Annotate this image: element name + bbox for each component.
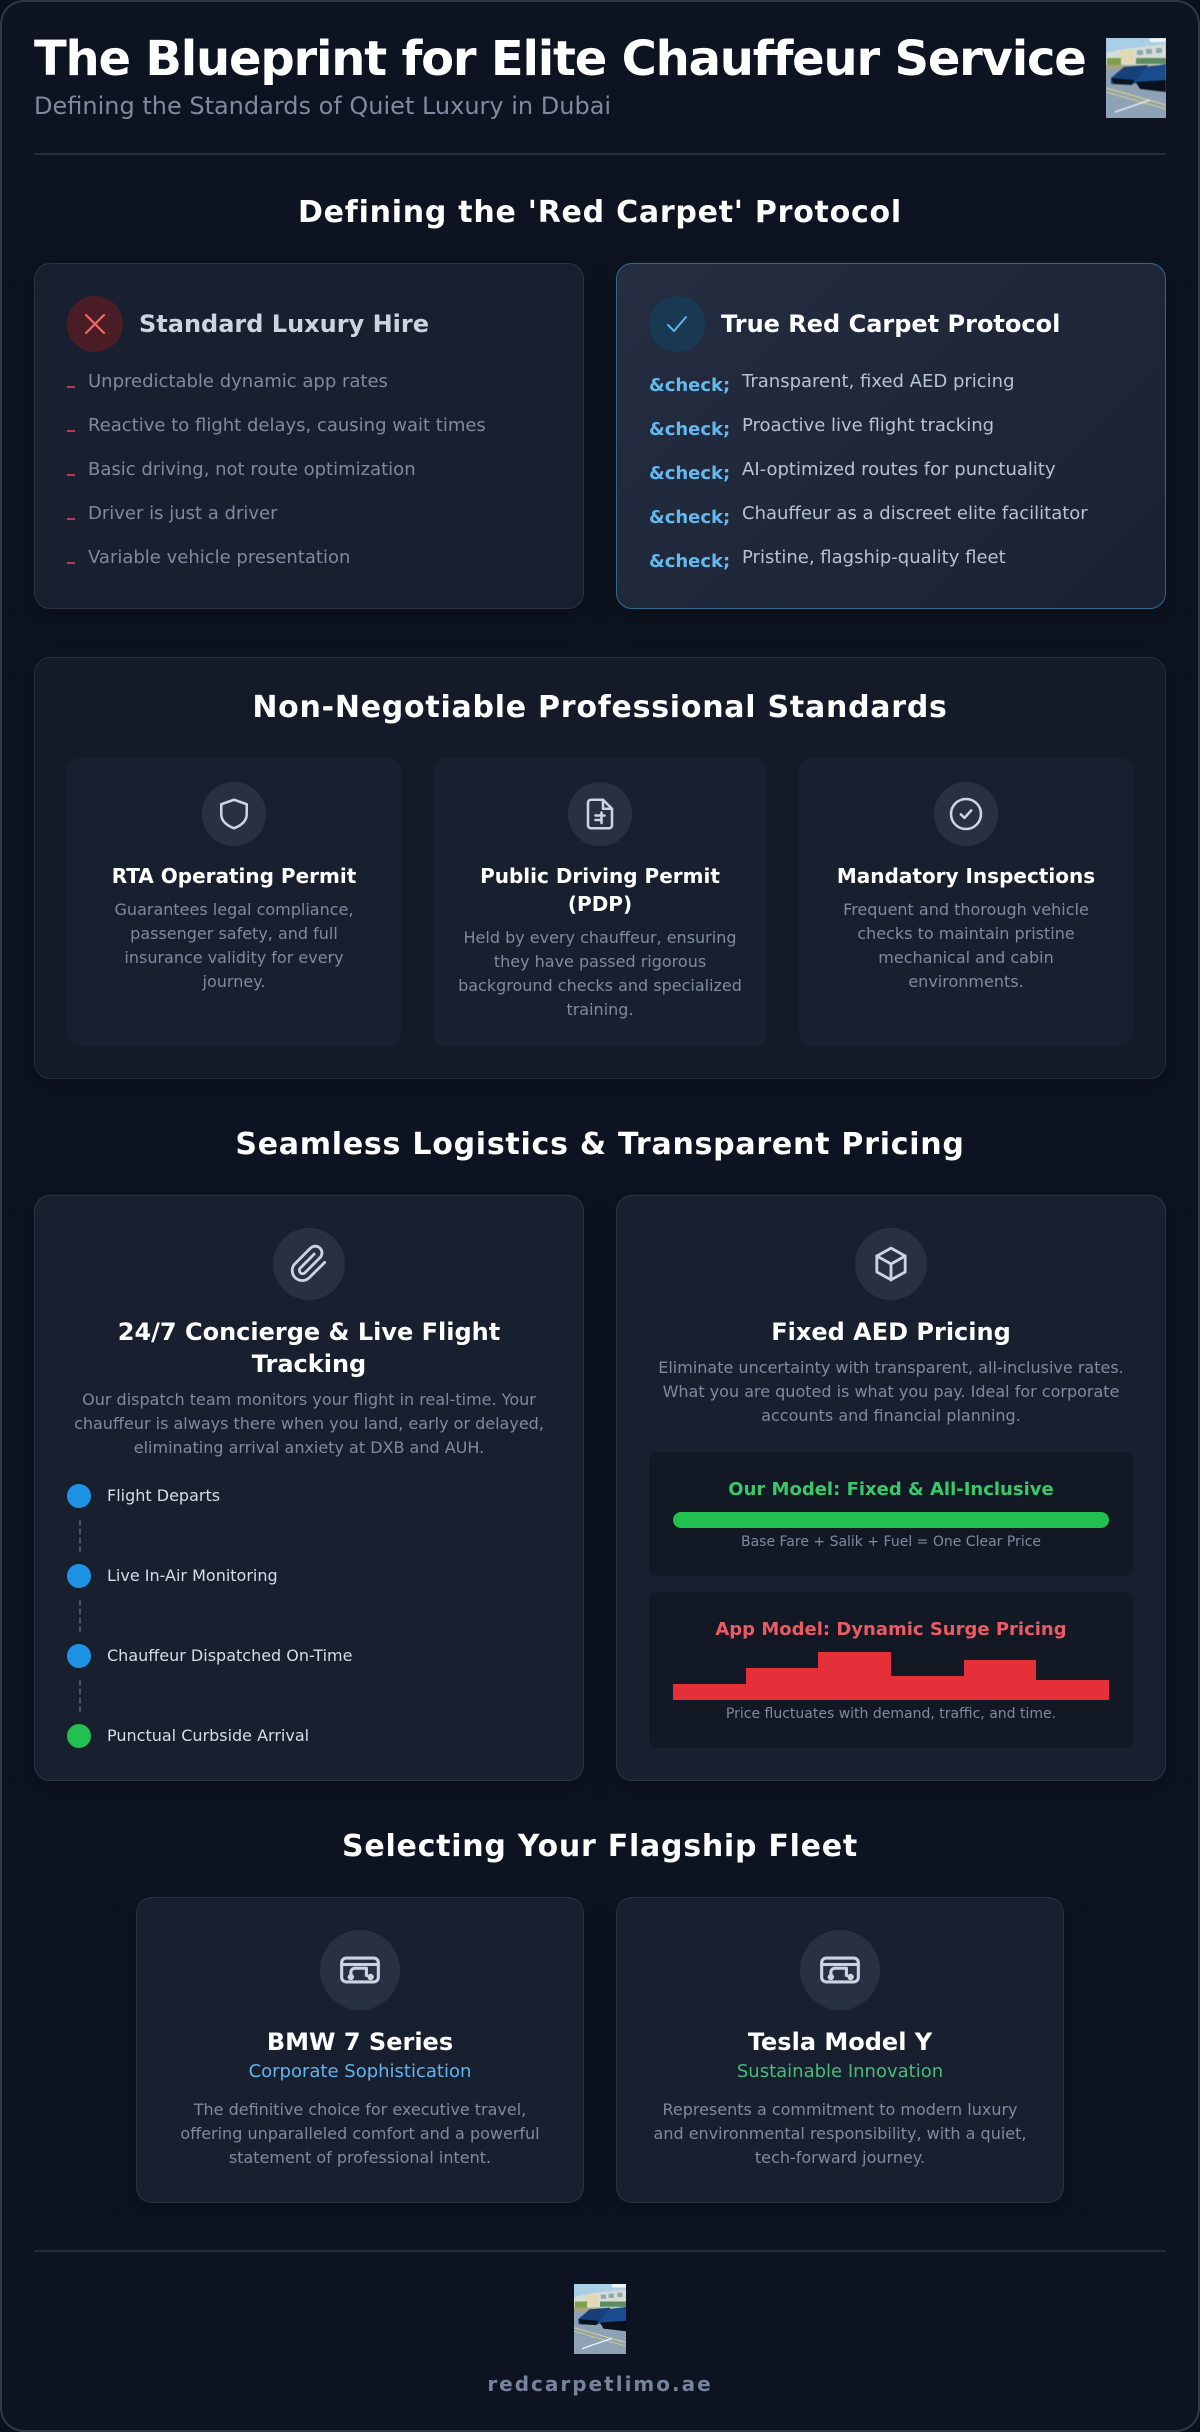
panel: professional standards — [34, 657, 1166, 1079]
card text: Guarantees legal compliance, passenger safety, and full insurance validity for every journey. — [115, 900, 353, 991]
car name: BMW 7 Series — [267, 2028, 453, 2056]
section heading: standards: Non-Negotiable Professional Standards — [252, 690, 948, 725]
card: mandatory inspections — [799, 758, 1133, 1046]
card: RTA operating permit — [67, 758, 401, 1046]
title: The Blueprint for Elite Chauffeur Service — [34, 31, 1086, 87]
card title: Public Driving Permit (PDP) — [480, 864, 720, 916]
heading: concierge: 24/7 Concierge & Live Flight Tracking — [118, 1318, 500, 1378]
card: Tesla Model Y — [616, 1897, 1064, 2203]
icon: car — [800, 1930, 880, 2010]
panel heading: standard luxury hire: Standard Luxury Hire — [139, 310, 429, 338]
car name: Tesla Model Y — [748, 2028, 932, 2056]
list: standard luxury hire drawbacks: Variable vehicle presentation — [88, 547, 350, 568]
list: red carpet benefits: Proactive live flight tracking — [742, 415, 994, 436]
icon: paperclip — [273, 1228, 345, 1300]
car description: Represents a commitment to modern luxury and environmental responsibility, with a quiet, tech-forward journey. — [654, 2100, 1026, 2167]
chart: fixed price bar — [673, 1512, 1109, 1528]
icon: circle check — [934, 782, 998, 846]
list: red carpet benefits: Pristine, flagship-quality fleet — [742, 547, 1006, 568]
image: fleet photo — [1106, 38, 1166, 118]
icon: document — [568, 782, 632, 846]
image: fleet photo small — [574, 2284, 626, 2354]
list: standard luxury hire drawbacks: Reactive to flight delays, causing wait times — [88, 415, 486, 436]
website: redcarpetlimo.ae — [487, 2372, 713, 2396]
icon: blue check — [649, 296, 705, 352]
chart: surge pricing bars — [673, 1652, 1109, 1700]
text: pricing description: Eliminate uncertainty with transparent, all-inclusive rates. What you are quoted is what you pay. Ideal for corporate accounts and financial planning. — [658, 1358, 1124, 1425]
card title: RTA Operating Permit — [112, 864, 356, 888]
panel: concierge and flight tracking — [34, 1195, 584, 1781]
section heading: fleet: Selecting Your Flagship Fleet — [342, 1829, 858, 1864]
panel: standard luxury hire — [34, 263, 584, 609]
divider — [34, 153, 1166, 155]
timeline: Flight Departs — [107, 1486, 220, 1505]
icon: red cross — [67, 296, 123, 352]
label: app model: App Model: Dynamic Surge Pricing — [715, 1619, 1067, 1640]
caption: fixed price: Base Fare + Salik + Fuel = One Clear Price — [741, 1534, 1041, 1550]
list: red carpet benefits: &check; — [649, 463, 730, 484]
section heading: protocol: Defining the 'Red Carpet' Protocol — [298, 195, 902, 230]
timeline: Live In-Air Monitoring — [107, 1566, 278, 1585]
box: our model — [649, 1452, 1133, 1576]
card title: Mandatory Inspections — [837, 864, 1095, 888]
timeline: Punctual Curbside Arrival — [107, 1726, 309, 1745]
car tagline: Sustainable Innovation — [737, 2061, 943, 2082]
section heading: logistics: Seamless Logistics & Transparent Pricing — [235, 1127, 965, 1162]
list: red carpet benefits: &check; — [649, 375, 730, 396]
header — [34, 31, 1166, 120]
list: red carpet benefits: AI-optimized routes for punctuality — [742, 459, 1056, 480]
footer — [34, 2250, 1166, 2410]
caption: surge pricing: Price fluctuates with demand, traffic, and time. — [726, 1706, 1056, 1722]
box: app model — [649, 1592, 1133, 1748]
timeline: Chauffeur Dispatched On-Time — [107, 1646, 352, 1665]
list: red carpet benefits: &check; — [649, 507, 730, 528]
list: red carpet benefits: &check; — [649, 419, 730, 440]
label: our model: Our Model: Fixed & All-Inclusive — [728, 1479, 1054, 1500]
panel: fixed AED pricing — [616, 1195, 1166, 1781]
list: standard luxury hire drawbacks: Basic driving, not route optimization — [88, 459, 416, 480]
card: public driving permit — [433, 758, 767, 1046]
card text: Held by every chauffeur, ensuring they have passed rigorous background checks and specialized training. — [458, 928, 742, 1019]
icon: cube — [855, 1228, 927, 1300]
list: standard luxury hire drawbacks — [67, 371, 486, 568]
timeline — [67, 1484, 352, 1748]
car tagline: Corporate Sophistication — [249, 2061, 471, 2082]
panel heading: true red carpet protocol: True Red Carpet Protocol — [721, 310, 1060, 338]
subtitle: Defining the Standards of Quiet Luxury in Dubai — [34, 92, 611, 120]
text: concierge description: Our dispatch team monitors your flight in real-time. Your chauffeur is always there when you land, early or delayed, eliminating arrival anxiety at DXB and AUH. — [74, 1390, 544, 1457]
heading: fixed pricing: Fixed AED Pricing — [771, 1318, 1011, 1346]
list: standard luxury hire drawbacks: Unpredictable dynamic app rates — [88, 371, 388, 392]
panel: true red carpet protocol — [616, 263, 1166, 609]
list: red carpet benefits: Chauffeur as a discreet elite facilitator — [742, 503, 1088, 524]
icon: car — [320, 1930, 400, 2010]
list: red carpet benefits — [649, 371, 1088, 572]
list: red carpet benefits: Transparent, fixed AED pricing — [742, 371, 1014, 392]
list: standard luxury hire drawbacks: Driver is just a driver — [88, 503, 277, 524]
car description: The definitive choice for executive travel, offering unparalleled comfort and a powerful statement of professional intent. — [180, 2100, 540, 2167]
card: BMW 7 Series — [136, 1897, 584, 2203]
icon: shield — [202, 782, 266, 846]
card text: Frequent and thorough vehicle checks to maintain pristine mechanical and cabin environments. — [843, 900, 1089, 991]
list: red carpet benefits: &check; — [649, 551, 730, 572]
